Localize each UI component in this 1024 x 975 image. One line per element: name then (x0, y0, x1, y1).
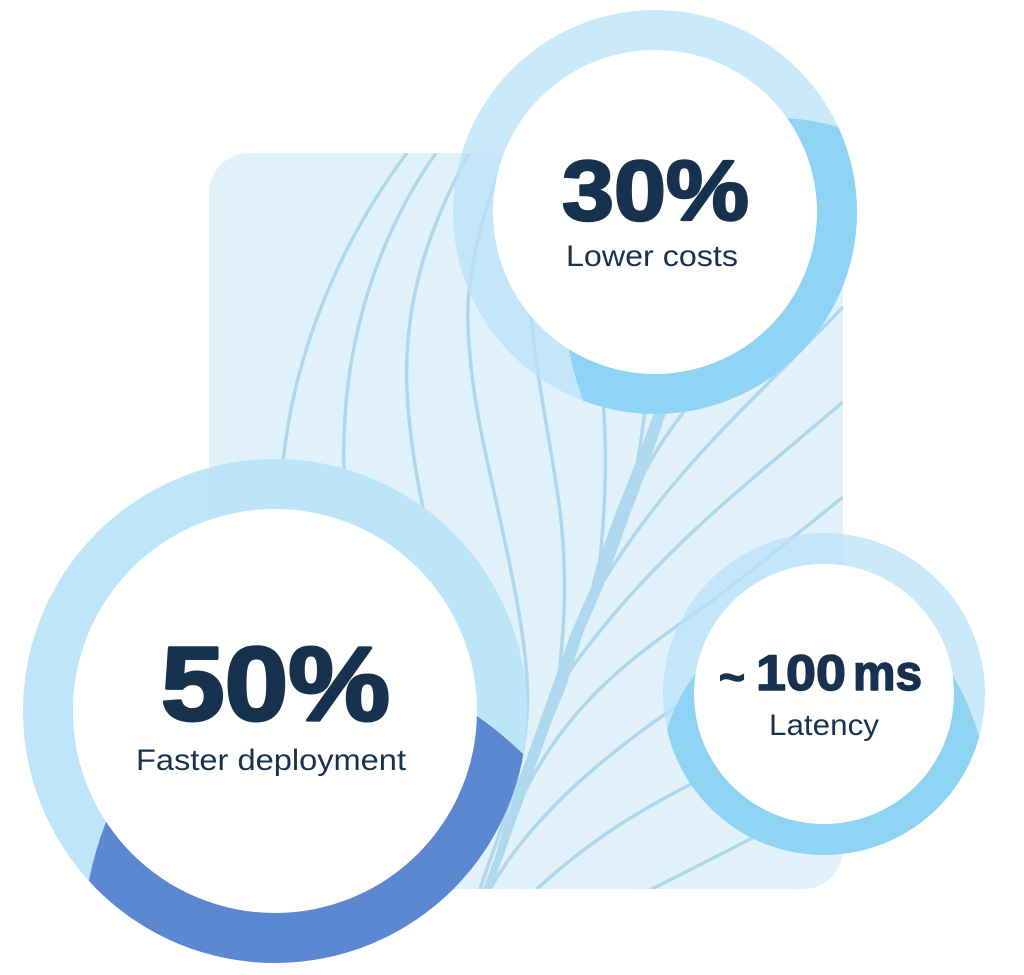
label: Lower costs (566, 240, 738, 273)
ring progress arc (569, 118, 857, 414)
label: Latency (769, 709, 879, 742)
inner disc (694, 564, 954, 824)
ring track (678, 548, 970, 840)
inner disc (493, 50, 817, 374)
ring progress arc (667, 673, 980, 855)
ring: 100 ms latency (663, 533, 985, 855)
value: 30% (562, 144, 749, 239)
value: 50% (161, 626, 390, 743)
thick tapered band (483, 410, 667, 889)
value: ~ (719, 653, 745, 702)
inner disc (73, 509, 477, 913)
background panel (209, 153, 843, 889)
ring: 50% faster deployment (40, 484, 600, 975)
ring track (473, 30, 837, 394)
ring track (48, 484, 502, 938)
value: 100 (756, 645, 846, 701)
ring progress arc (88, 716, 524, 963)
label: Faster deployment (136, 744, 407, 777)
value (719, 645, 922, 702)
flowing lines converging to the bottom (283, 153, 843, 890)
ring: 30% lower costs (453, 10, 857, 414)
value: ms (853, 645, 922, 701)
